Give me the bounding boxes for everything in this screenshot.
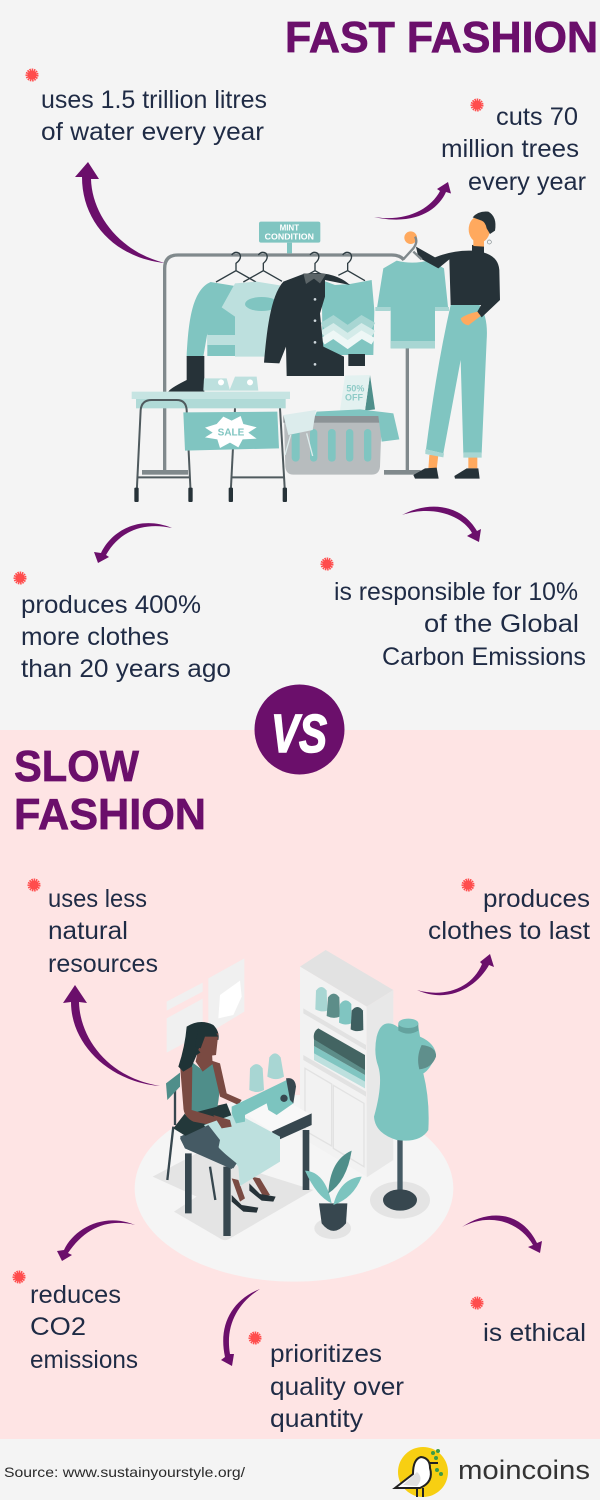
title: slow fashion xyxy=(14,742,206,839)
knit vest xyxy=(322,280,374,355)
badge: VS: VS xyxy=(271,704,327,764)
fact: trees: every year xyxy=(468,168,586,196)
sign: mint condition: CONDITION xyxy=(265,232,314,241)
fact: trees xyxy=(441,100,586,196)
illustration: seamstress at sewing machine xyxy=(135,950,453,1282)
fact: ethical xyxy=(472,1298,586,1347)
fact: clothes to last: produces xyxy=(483,885,590,913)
seamstress xyxy=(173,1022,276,1213)
panel: footer xyxy=(0,1439,600,1500)
arrow: to quality xyxy=(221,1289,260,1366)
sewing machine xyxy=(213,1053,296,1128)
laundry basket xyxy=(283,415,382,475)
50% off sign: OFF xyxy=(345,393,363,403)
jacket xyxy=(264,273,365,376)
fact: clothes to last: clothes to last xyxy=(428,917,590,945)
fact: clothes: more clothes xyxy=(21,623,169,651)
fact: carbon: Carbon Emissions xyxy=(382,643,586,671)
fact: quality xyxy=(250,1333,404,1433)
mannequin stand top: tee xyxy=(375,260,449,348)
fact: natural resources: natural xyxy=(48,917,128,945)
brand name: moincoins xyxy=(458,1455,590,1485)
sale banner xyxy=(183,412,279,451)
fact: CO2: emissions xyxy=(30,1346,138,1374)
fact: clothes: produces 400% xyxy=(21,591,201,619)
fact: quality: prioritizes xyxy=(270,1340,382,1368)
title: fast fashion: FAST FASHION xyxy=(285,13,598,62)
fact: natural resources: resources xyxy=(48,950,158,978)
arrow: to clothes xyxy=(94,523,172,563)
fact: water: uses 1.5 trillion litres xyxy=(41,86,267,114)
badge: VS xyxy=(254,684,344,774)
shelving unit xyxy=(300,950,393,1177)
arrow: to CO2 xyxy=(57,1220,135,1261)
panel: fast fashion xyxy=(0,0,600,730)
fact: clothes to last xyxy=(428,880,590,945)
fact: clothes xyxy=(15,573,231,683)
sneakers xyxy=(203,377,258,391)
hangers xyxy=(216,252,365,282)
fact: water xyxy=(27,70,267,146)
illustration: clothes rack and shopper xyxy=(132,212,500,502)
shopper xyxy=(403,212,500,479)
fact: trees: million trees xyxy=(441,135,579,163)
chair xyxy=(167,1087,215,1200)
title: slow fashion: FASHION xyxy=(14,790,206,839)
fact: ethical: is ethical xyxy=(483,1319,586,1347)
fact: CO2 xyxy=(14,1272,138,1374)
arrow: to carbon xyxy=(402,507,481,542)
thread spools xyxy=(315,987,363,1031)
fact: trees: cuts 70 xyxy=(496,103,578,131)
sweater xyxy=(187,282,236,357)
sale banner: SALE xyxy=(218,427,245,438)
potted plant xyxy=(305,1151,362,1239)
fact: water: of water every year xyxy=(41,118,264,146)
fact: CO2: reduces xyxy=(30,1281,121,1309)
50% off sign xyxy=(340,375,375,411)
floor ellipse xyxy=(135,1095,453,1282)
stool and legs xyxy=(137,400,285,493)
rack xyxy=(165,255,407,472)
wall pictures xyxy=(167,958,244,1053)
dress form xyxy=(370,1019,436,1219)
fact: carbon: is responsible for 10% xyxy=(334,578,578,606)
fact: quality: quantity xyxy=(270,1405,364,1433)
fact: CO2: CO2 xyxy=(30,1313,86,1341)
fact: quality: quality over xyxy=(270,1373,404,1401)
arrow: to ethical xyxy=(462,1215,542,1253)
fabric xyxy=(204,1113,280,1186)
sign: mint condition: MINT xyxy=(280,224,299,233)
folded fabrics xyxy=(314,1028,365,1088)
sewing table xyxy=(180,1097,312,1236)
fact: natural resources xyxy=(29,880,158,978)
title: slow fashion: SLOW xyxy=(14,742,139,791)
fact: natural resources: uses less xyxy=(48,885,147,913)
arrow: to trees xyxy=(374,182,451,220)
fact: carbon: of the Global xyxy=(424,610,579,638)
boot xyxy=(168,356,204,392)
fact: carbon xyxy=(322,559,586,671)
arrow: to last xyxy=(417,954,494,995)
folded clothes xyxy=(283,409,399,456)
50% off sign: 50% xyxy=(346,383,364,393)
table xyxy=(132,392,290,408)
panel: slow fashion xyxy=(0,730,600,1439)
arrow: to water xyxy=(75,162,165,263)
fact: clothes: than 20 years ago xyxy=(21,655,231,683)
t-shirt xyxy=(222,282,280,357)
arrow: to resources xyxy=(63,985,160,1086)
sign: mint condition xyxy=(259,222,320,253)
icon: moincoins bird logo xyxy=(395,1447,448,1497)
floor shadow xyxy=(153,1153,313,1240)
source text: Source: www.sustainyourstyle.org/ xyxy=(4,1464,245,1480)
